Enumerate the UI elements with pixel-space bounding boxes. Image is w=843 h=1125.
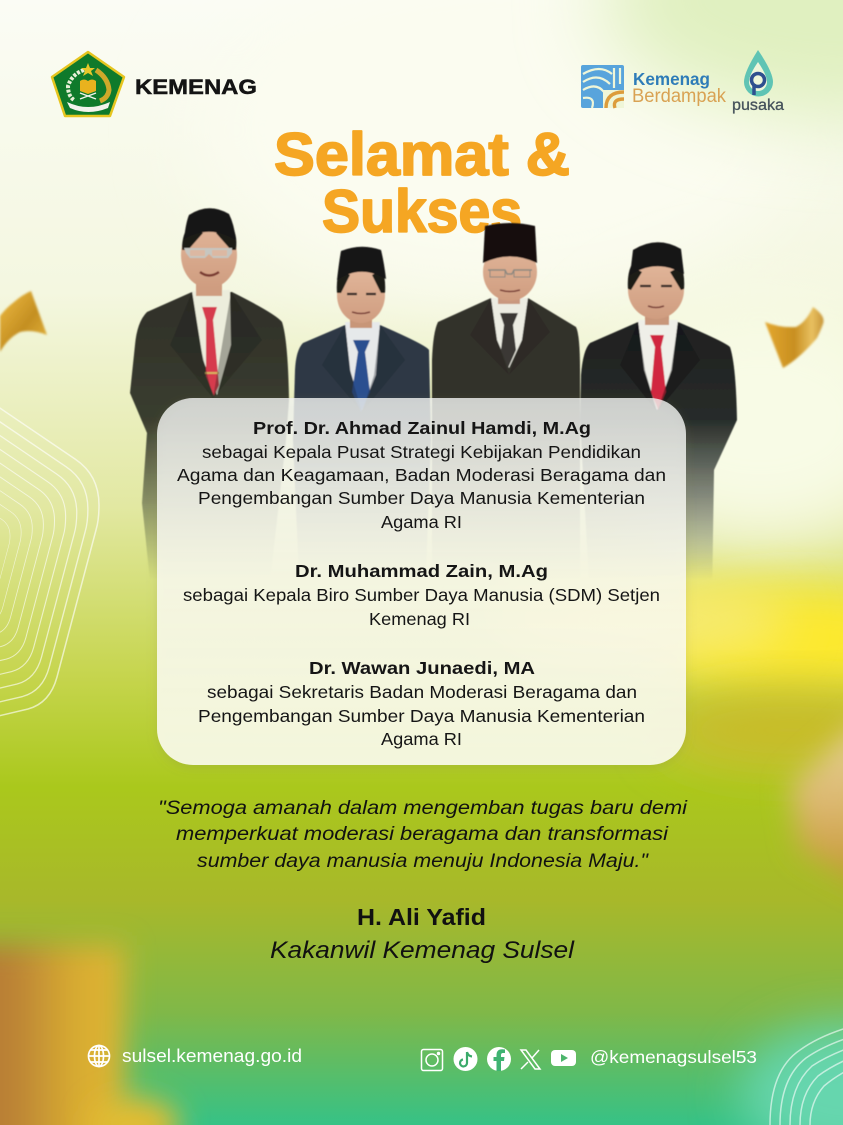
text block: Ahmad Zainul Hamdi: Agama RI bbox=[381, 512, 462, 532]
website: sulsel.kemenag.go.id bbox=[122, 1046, 302, 1066]
icon: youtube bbox=[551, 1050, 576, 1066]
text block: Muhammad Zain: Dr. Muhammad Zain, M.Ag bbox=[295, 561, 548, 581]
quote: "Semoga amanah dalam mengemban tugas baru demi bbox=[158, 797, 688, 819]
person 4 bbox=[580, 242, 737, 600]
logo: Kemenag Berdampak bbox=[581, 65, 624, 108]
logo: Kemenag emblem bbox=[52, 52, 124, 116]
quote: sumber daya manusia menuju Indonesia Maju." bbox=[197, 850, 649, 872]
logo text: Kemenag Berdampak: Kemenag bbox=[633, 69, 710, 89]
text block: Muhammad Zain bbox=[183, 561, 660, 629]
icon: globe bbox=[88, 1046, 110, 1066]
person 2 bbox=[293, 246, 431, 530]
text block: Wawan Junaedi: sebagai Sekretaris Badan Moderasi Beragama dan bbox=[207, 682, 637, 702]
photo: four officials bbox=[130, 208, 737, 600]
icon: X bbox=[521, 1050, 540, 1069]
person 3 bbox=[431, 222, 581, 530]
signatory title: Kakanwil Kemenag Sulsel bbox=[270, 937, 575, 964]
quote bbox=[158, 797, 688, 872]
person 1 bbox=[130, 208, 289, 600]
icon: gold ribbon left bbox=[0, 291, 47, 352]
quote: memperkuat moderasi beragama dan transformasi bbox=[176, 823, 669, 845]
icon: tiktok bbox=[454, 1047, 478, 1071]
text block: Muhammad Zain: sebagai Kepala Biro Sumber Daya Manusia (SDM) Setjen bbox=[183, 585, 660, 605]
text block: Ahmad Zainul Hamdi: Prof. Dr. Ahmad Zainul Hamdi, M.Ag bbox=[253, 418, 591, 438]
text block: Ahmad Zainul Hamdi: Agama dan Keagamaan, Badan Moderasi Beragama dan bbox=[177, 465, 666, 485]
text block: Ahmad Zainul Hamdi: sebagai Kepala Pusat Strategi Kebijakan Pendidikan bbox=[202, 442, 641, 462]
decorative line pattern left bbox=[0, 381, 99, 725]
text block: Ahmad Zainul Hamdi bbox=[177, 418, 666, 532]
text block: Wawan Junaedi: Pengembangan Sumber Daya Manusia Kementerian bbox=[198, 706, 645, 726]
text block: Wawan Junaedi: Agama RI bbox=[381, 729, 462, 749]
logo: pusaka drop bbox=[744, 50, 773, 96]
text block: Wawan Junaedi bbox=[198, 658, 645, 749]
logo text: Kemenag Berdampak: Berdampak bbox=[632, 86, 726, 107]
icon: instagram bbox=[422, 1050, 442, 1070]
title: Sukses bbox=[322, 178, 522, 245]
social handle: @kemenagsulsel53 bbox=[590, 1047, 757, 1067]
decorative line pattern bottom right bbox=[770, 1024, 843, 1125]
title bbox=[274, 121, 570, 245]
signatory name: H. Ali Yafid bbox=[357, 904, 486, 930]
logo text: pusaka: pusaka bbox=[732, 97, 784, 114]
text block: Ahmad Zainul Hamdi: Pengembangan Sumber Daya Manusia Kementerian bbox=[198, 488, 645, 508]
title: Selamat & bbox=[274, 121, 570, 188]
text block: Wawan Junaedi: Dr. Wawan Junaedi, MA bbox=[309, 658, 535, 678]
logo text: KEMENAG: KEMENAG bbox=[135, 75, 257, 99]
panel: appointments bbox=[157, 398, 686, 765]
logo text: Kemenag Berdampak bbox=[632, 69, 726, 107]
text block: Muhammad Zain: Kemenag RI bbox=[369, 609, 470, 629]
icon: facebook bbox=[487, 1047, 511, 1071]
icon: gold ribbon right bbox=[765, 307, 824, 368]
